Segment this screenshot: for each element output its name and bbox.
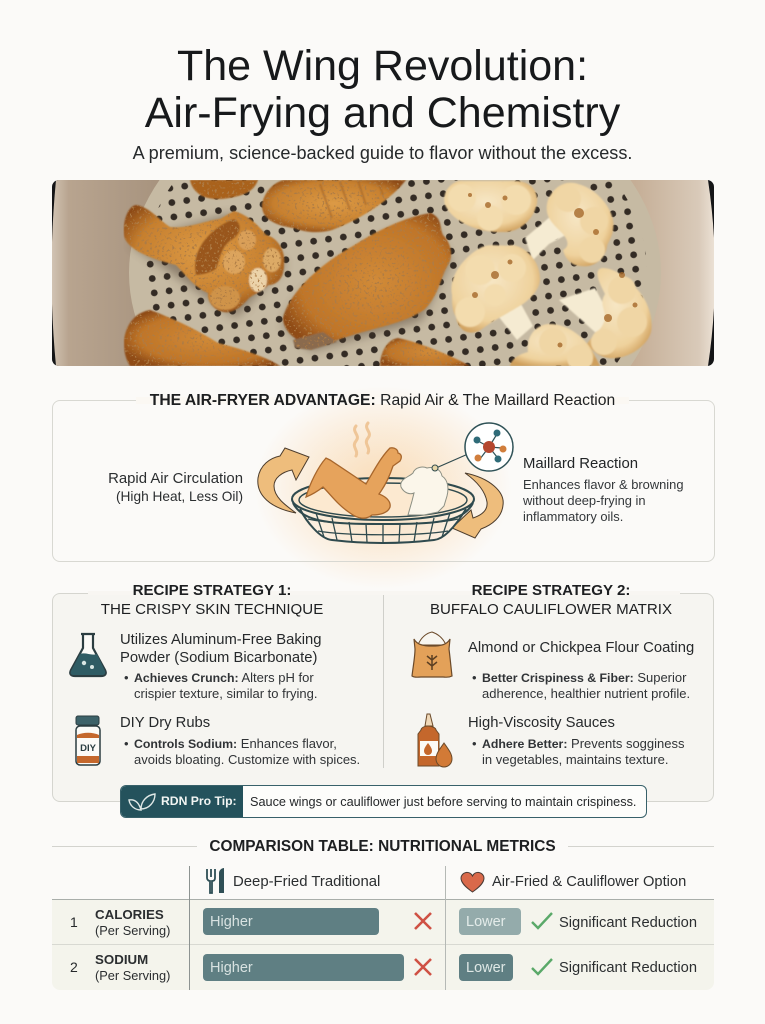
title: The Wing Revolution: (177, 42, 588, 90)
icon: green check (531, 912, 553, 930)
result text: Significant Reduction (559, 915, 697, 931)
text: • (124, 670, 129, 685)
metric label: (Per Serving) (95, 923, 170, 938)
bar: higher (203, 954, 404, 981)
bullet: achieves crunch: Achieves Crunch: Alters pH for (134, 670, 314, 685)
heading: strategy 1 (101, 582, 323, 618)
text: baking powder (120, 632, 321, 666)
subtitle: A premium, science-backed guide to flavor without the excess. (133, 143, 632, 163)
bullet: controls sodium (124, 736, 360, 767)
icon: molecule (432, 423, 513, 471)
heading gap mask (136, 397, 629, 404)
metric label: SODIUM (95, 952, 148, 967)
bullet: achieves crunch: crispier texture, similar to frying. (134, 686, 318, 701)
bullet: better crispiness: adherence, healthier nutrient profile. (482, 686, 690, 701)
bottom left wing (124, 310, 280, 366)
bar: lower (459, 954, 513, 981)
heading: strategy 2: RECIPE STRATEGY 2: (472, 582, 630, 599)
metric label: CALORIES (95, 907, 164, 922)
tip text: Sauce wings or cauliflower just before serving to maintain crispiness. (250, 795, 636, 809)
divider (383, 595, 384, 768)
chicken wing (306, 448, 401, 518)
row divider (52, 944, 714, 945)
comparison heading: COMPARISON TABLE: NUTRITIONAL METRICS (209, 838, 556, 855)
description: maillard reaction: Enhances flavor & browning (523, 477, 684, 492)
icon: red cross (414, 958, 432, 976)
heading: strategy 2 (430, 582, 672, 618)
drumstick (124, 205, 284, 312)
metric label (95, 952, 170, 983)
heading: strategy 2: BUFFALO CAULIFLOWER MATRIX (430, 601, 672, 618)
panel: recipe strategies (52, 593, 714, 802)
text: • (124, 736, 129, 751)
comparison rule left (52, 846, 197, 847)
basket floor (129, 180, 644, 366)
title: Air-Frying and Chemistry (145, 89, 620, 137)
centre wing (283, 213, 451, 348)
metric label: (Per Serving) (95, 968, 170, 983)
bar: lower: Lower (466, 960, 506, 976)
floret 5 (510, 324, 600, 366)
text: sauces: High-Viscosity Sauces (468, 715, 615, 731)
basket front (293, 503, 473, 543)
bullet: achieves crunch (124, 670, 318, 701)
icon: sauce bottle (418, 714, 452, 768)
illustration: basket, wing, cauliflower and air arrows (257, 421, 514, 544)
wing shadows (130, 214, 451, 351)
icon: red cross (414, 912, 432, 930)
section heading: THE AIR-FRYER ADVANTAGE: Rapid Air & The Maillard Reaction (150, 392, 615, 409)
label: rapid air circulation: (High Heat, Less Oil) (116, 489, 243, 504)
metric label (95, 907, 170, 938)
icon: DIY spice jar: DIY (80, 743, 97, 754)
text: • (472, 670, 477, 685)
column header: air-fried: Air-Fried & Cauliflower Option (492, 874, 686, 890)
result text: Significant Reduction (559, 960, 697, 976)
row backgrounds (52, 899, 714, 990)
arrow: right (452, 473, 503, 538)
row 2 (70, 952, 697, 983)
icon: green check (531, 958, 553, 976)
floret 2 (524, 218, 564, 260)
row number: 1 (70, 914, 78, 930)
panel: air-fryer advantage (52, 400, 715, 562)
description: maillard reaction (523, 477, 684, 524)
text: flour coating: Almond or Chickpea Flour Coating (468, 640, 694, 656)
icon: fork and knife (206, 868, 224, 894)
bottom centre wing (380, 338, 470, 366)
cauliflower (401, 467, 448, 515)
top left wing piece (190, 180, 258, 199)
text: • (472, 736, 477, 751)
row number: 2 (70, 959, 78, 975)
bullet: better crispiness (472, 670, 690, 701)
label: rapid air circulation: Rapid Air Circulation (108, 471, 243, 487)
icon: DIY spice jar (75, 716, 101, 766)
column line 1 (189, 866, 190, 990)
heading: strategy 1: RECIPE STRATEGY 1: (133, 582, 291, 599)
bar: lower (459, 908, 521, 935)
comparison rule right (568, 846, 714, 847)
tip label: RDN Pro Tip: (161, 794, 237, 808)
column header: deep-fried: Deep-Fried Traditional (233, 874, 380, 890)
pan walls (52, 180, 160, 366)
basket back (292, 478, 474, 520)
description: maillard reaction: without deep-frying in (523, 493, 646, 508)
photo: wings and cauliflower in air-fryer basket (52, 180, 714, 366)
text: dry rubs: DIY Dry Rubs (120, 715, 210, 731)
icon: steam (354, 423, 369, 456)
bullet: adhere better (472, 736, 684, 767)
icon: flour sack (411, 632, 453, 678)
row 1 (70, 907, 697, 938)
bullet: better crispiness: Better Crispiness & Fiber: Superior (482, 670, 686, 685)
label: maillard reaction: Maillard Reaction (523, 456, 638, 472)
bullet: controls sodium: avoids bloating. Customize with spices. (134, 752, 360, 767)
heading mask (88, 591, 680, 595)
cauliflower florets (444, 181, 652, 371)
icon: heart (460, 872, 484, 892)
tip label (120, 785, 243, 818)
heading: strategy 1: THE CRISPY SKIN TECHNIQUE (101, 601, 323, 618)
text: baking powder: Powder (Sodium Bicarbonate) (120, 650, 317, 666)
bar: higher: Higher (210, 914, 253, 930)
column line 2 (445, 866, 446, 990)
arrow: left (258, 448, 309, 513)
floret 4 (559, 287, 606, 333)
bullet: controls sodium: Controls Sodium: Enhances flavor, (134, 736, 337, 751)
bar: higher (203, 908, 379, 935)
title (144, 42, 620, 137)
bar: higher: Higher (210, 960, 253, 976)
floret 3 (499, 304, 534, 340)
floret 1 (444, 181, 537, 232)
icon: flask (69, 632, 107, 678)
top wing (262, 180, 406, 232)
label: rapid air circulation (108, 471, 243, 504)
comparison table (52, 866, 714, 990)
description: maillard reaction: inflammatory oils. (523, 509, 623, 524)
bar: lower: Lower (466, 914, 506, 930)
text: baking powder: Utilizes Aluminum-Free Baking (120, 632, 321, 648)
bullet: adhere better: Adhere Better: Prevents sogginess (482, 736, 684, 751)
bullet: adhere better: in vegetables, maintains texture. (482, 752, 668, 767)
background glow (253, 385, 513, 590)
callout: RDN pro tip (120, 785, 647, 818)
